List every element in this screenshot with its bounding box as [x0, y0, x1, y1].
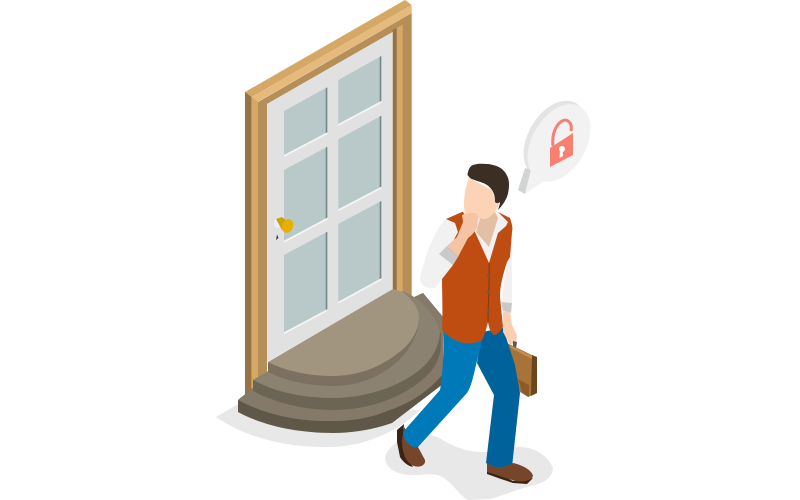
- right sleeve: [501, 225, 512, 303]
- hair: [468, 164, 509, 210]
- face: [464, 178, 499, 219]
- left cuff: [439, 246, 458, 265]
- right cuff: [501, 302, 512, 313]
- bag handle: [513, 341, 517, 348]
- top step: [268, 289, 419, 386]
- floor shadow: man: [385, 434, 553, 500]
- shirt hem: [484, 320, 490, 331]
- door knob: [274, 217, 295, 240]
- right hand: [503, 312, 517, 345]
- front leg: [403, 330, 482, 447]
- back shoe: [487, 463, 533, 484]
- man: [397, 164, 537, 484]
- briefcase: [507, 343, 537, 397]
- middle step: [253, 291, 441, 410]
- front shoe: [397, 424, 425, 467]
- door panes: [284, 56, 381, 334]
- door leaf: [267, 32, 393, 362]
- speech bubble: [511, 90, 603, 194]
- back leg: [477, 328, 520, 468]
- vest: [442, 212, 512, 343]
- left sleeve: [420, 219, 458, 288]
- door frame: [245, 0, 412, 400]
- shirt collar and chest: [463, 211, 508, 263]
- bubble tail: [518, 168, 531, 194]
- hand on chin: [447, 213, 478, 257]
- bottom step: [238, 293, 443, 433]
- icon: open padlock: [550, 120, 573, 167]
- bubble face: [525, 170, 543, 194]
- stone steps: [238, 289, 443, 433]
- bubble edge: [511, 90, 599, 189]
- floor shadow: steps: [216, 403, 420, 447]
